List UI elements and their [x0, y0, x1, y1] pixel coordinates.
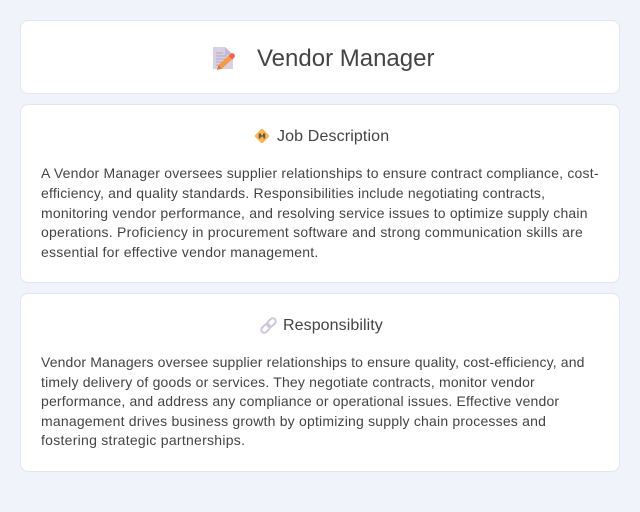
- icon: document with pencil: [213, 47, 235, 70]
- title: Vendor Manager: [257, 45, 434, 72]
- heading: job description: Job Description: [277, 128, 389, 145]
- panel: job description: [20, 104, 620, 283]
- text block: responsibility: performance, and address any compliance or operational issues. Effective vendor: [41, 393, 559, 409]
- panel: responsibility: [20, 293, 620, 472]
- text block: job description: monitoring vendor performance, and resolving service issues to optimize supply chain: [41, 205, 588, 221]
- text block: responsibility: Vendor Managers oversee supplier relationships to ensure quality, cost-efficiency, and: [41, 354, 585, 370]
- text block: responsibility: timely delivery of goods or services. They negotiate contracts, monitor vendor: [41, 374, 535, 390]
- icon: chain link: [260, 317, 277, 334]
- text block: responsibility: fostering strategic partnerships.: [41, 432, 245, 448]
- text block: responsibility: [41, 354, 585, 448]
- text block: job description: operations. Proficiency in procurement software and strong communication skills are: [41, 224, 583, 240]
- text block: job description: A Vendor Manager oversees supplier relationships to ensure contract compliance, cost-: [41, 165, 599, 181]
- heading: responsibility: Responsibility: [283, 317, 383, 334]
- text block: job description: [41, 165, 599, 260]
- text block: job description: essential for effective vendor management.: [41, 244, 319, 260]
- icon: orange diamond sign: [254, 128, 270, 144]
- text block: job description: efficiency, and quality standards. Responsibilities include negotiating contracts,: [41, 185, 545, 201]
- text block: responsibility: management drives business growth by optimizing supply chain processes and: [41, 413, 546, 429]
- panel: title card: [20, 20, 620, 94]
